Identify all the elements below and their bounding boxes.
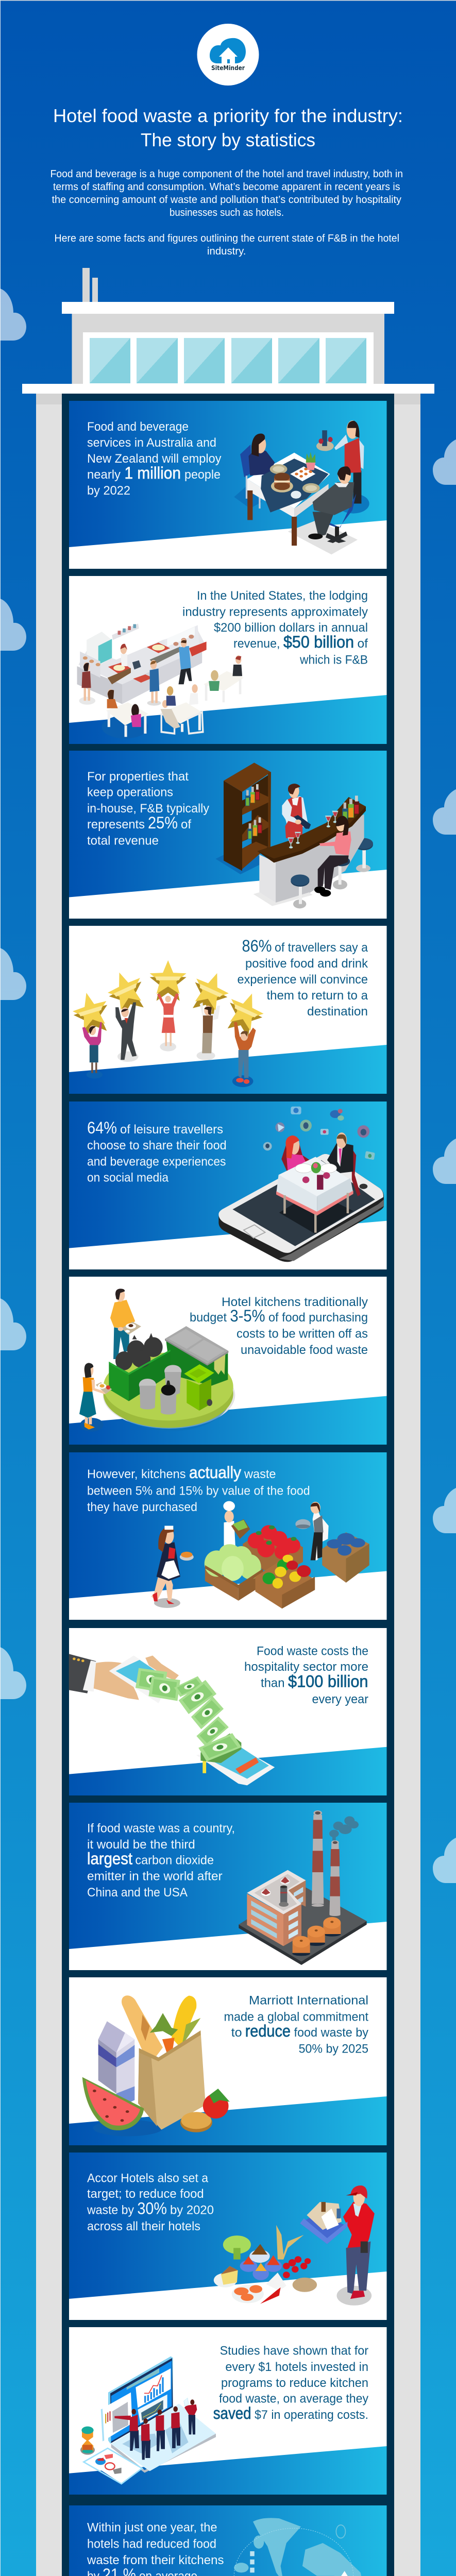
text: 50% by 2025 <box>299 2042 368 2056</box>
text: emitter in the world after <box>87 1870 223 1884</box>
title: Hotel food waste a priority for the industry: <box>53 105 403 126</box>
illustration: money between phones <box>69 1654 275 1785</box>
illustration: factory <box>239 1810 367 1965</box>
intro text <box>50 168 403 257</box>
roof ledge <box>22 384 434 394</box>
panel 3 <box>69 751 386 919</box>
text: 64% <box>87 1118 117 1137</box>
text <box>244 1645 368 1706</box>
text: hotels had reduced food <box>87 2537 216 2551</box>
illustration: bartender at bar <box>215 762 373 908</box>
text: New Zealand will employ <box>87 452 222 466</box>
text: reduce <box>245 2022 291 2040</box>
text: by 2020 <box>170 2204 214 2217</box>
text: budget <box>190 1311 227 1325</box>
intro text: Food and beverage is a huge component of the hotel and travel industry, both in <box>50 168 403 180</box>
text <box>87 2521 224 2576</box>
text <box>87 1463 310 1514</box>
title: The story by statistics <box>141 129 315 150</box>
text <box>237 937 368 1019</box>
text: they have purchased <box>87 1500 197 1514</box>
text: to <box>231 2026 242 2040</box>
text: it would be the third <box>87 1838 195 1852</box>
text: of travellers say a <box>275 941 368 955</box>
text <box>190 1295 368 1357</box>
illustration: produce crates and staff <box>151 1501 369 1608</box>
text: waste by <box>87 2204 134 2217</box>
panel 13 <box>69 2505 386 2576</box>
text: people <box>184 468 221 482</box>
illustration: people holding stars <box>70 960 268 1087</box>
text: than <box>261 1676 284 1690</box>
text: them to return to a <box>267 989 368 1003</box>
text: 30% <box>137 2199 167 2218</box>
text: food waste, on average they <box>219 2392 368 2406</box>
text: which is F&B <box>299 653 368 667</box>
text: experience will convince <box>237 973 368 987</box>
text: costs to be written off as <box>237 1327 368 1341</box>
intro text: the concerning amount of waste and pollution that’s contributed by hospitality <box>52 194 401 206</box>
text: China and the USA <box>87 1886 188 1900</box>
text: keep operations <box>87 786 173 800</box>
panel 7 <box>69 1452 386 1620</box>
text: of food purchasing <box>268 1311 368 1325</box>
illustration: businessman and chart <box>234 2518 370 2576</box>
text: of <box>358 637 368 651</box>
panel 11 <box>69 2153 386 2320</box>
text: 3-5% <box>230 1307 265 1325</box>
panel 10 <box>69 1977 386 2145</box>
panel 8 <box>69 1628 386 1795</box>
text: industry represents approximately <box>182 605 368 619</box>
text: $7 in operating costs. <box>255 2408 368 2422</box>
text: services in Australia and <box>87 436 216 450</box>
text: However, kitchens <box>87 1467 186 1481</box>
panel 12 <box>69 2327 386 2495</box>
text <box>87 420 222 498</box>
text: 86% <box>242 937 272 955</box>
text <box>224 1994 368 2056</box>
hotel pillars <box>36 394 420 2576</box>
text: waste <box>244 1467 276 1481</box>
text: Marriott International <box>249 1994 368 2008</box>
text: $100 billion <box>288 1672 368 1691</box>
logo: SiteMinder <box>211 64 245 72</box>
text: by 2022 <box>87 484 130 498</box>
clouds left <box>0 289 26 1699</box>
illustration: waste bins <box>79 1289 235 1432</box>
text: $50 billion <box>283 633 354 651</box>
text: waste from their kitchens <box>87 2553 224 2567</box>
intro text: Here are some facts and figures outlining the current state of F&B in the hotel <box>55 233 399 244</box>
text: 25% <box>148 814 178 832</box>
text: Hotel kitchens traditionally <box>222 1295 368 1309</box>
panel 9 <box>69 1803 386 1970</box>
text: choose to share their food <box>87 1139 227 1153</box>
illustration: dashboard team <box>80 2357 216 2484</box>
intro text: businesses such as hotels. <box>170 207 284 218</box>
illustration: delivery and food <box>214 2185 375 2306</box>
text: target; to reduce food <box>87 2187 204 2201</box>
panel 6 <box>69 1277 386 1445</box>
panel 5 <box>69 1101 386 1269</box>
intro text: terms of staffing and consumption. What’s become apparent in recent years is <box>53 181 400 193</box>
illustration: restaurant table <box>234 420 369 554</box>
illustration: hotel buffet <box>77 623 244 738</box>
text: represents <box>87 818 145 832</box>
text: across all their hotels <box>87 2219 200 2233</box>
text: destination <box>307 1005 368 1019</box>
text <box>87 770 209 848</box>
text: revenue, <box>233 637 280 651</box>
text <box>182 589 368 667</box>
text <box>213 2344 368 2422</box>
text: unavoidable food waste <box>241 1343 368 1357</box>
text: Food waste costs the <box>257 1645 368 1658</box>
text: total revenue <box>87 834 159 848</box>
text: nearly <box>87 468 121 482</box>
text: and beverage experiences <box>87 1155 226 1168</box>
text: largest <box>87 1849 132 1868</box>
panel 1 <box>69 401 386 569</box>
text: positive food and drink <box>245 957 368 971</box>
panel 2 <box>69 576 386 744</box>
clouds right <box>433 439 456 1883</box>
text: of leisure travellers <box>120 1123 223 1137</box>
text: carbon dioxide <box>135 1853 214 1867</box>
text <box>87 2172 214 2233</box>
title <box>53 105 403 150</box>
text: $200 billion dollars in annual <box>214 621 368 635</box>
text: saved <box>213 2404 251 2422</box>
panel 4 <box>69 926 386 1094</box>
text: every $1 hotels invested in <box>225 2360 368 2374</box>
text: on social media <box>87 1171 169 1185</box>
logo <box>197 24 259 86</box>
text: Studies have shown that for <box>220 2344 368 2358</box>
intro text: industry. <box>207 246 246 257</box>
text: For properties that <box>87 770 189 784</box>
text: between 5% and 15% by value of the food <box>87 1484 310 1498</box>
text: every year <box>312 1692 368 1706</box>
text: Accor Hotels also set a <box>87 2172 209 2185</box>
text: made a global commitment <box>224 2010 368 2024</box>
text: Within just one year, the <box>87 2521 217 2535</box>
text: 1 million <box>125 464 181 482</box>
text: In the United States, the lodging <box>197 589 368 603</box>
hotel roof <box>62 268 394 384</box>
illustration: groceries <box>82 1995 230 2136</box>
hotel frame <box>62 394 394 2576</box>
text: of <box>181 818 191 832</box>
text <box>87 1118 227 1185</box>
text: actually <box>189 1463 241 1482</box>
illustration: dinner on phone <box>218 1107 384 1262</box>
text: Food and beverage <box>87 420 189 434</box>
text: in-house, F&B typically <box>87 802 209 816</box>
text: programs to reduce kitchen <box>221 2376 368 2390</box>
text: If food waste was a country, <box>87 1822 235 1835</box>
text: hospitality sector more <box>244 1660 368 1674</box>
text <box>87 1822 235 1900</box>
text: food waste by <box>294 2026 368 2040</box>
